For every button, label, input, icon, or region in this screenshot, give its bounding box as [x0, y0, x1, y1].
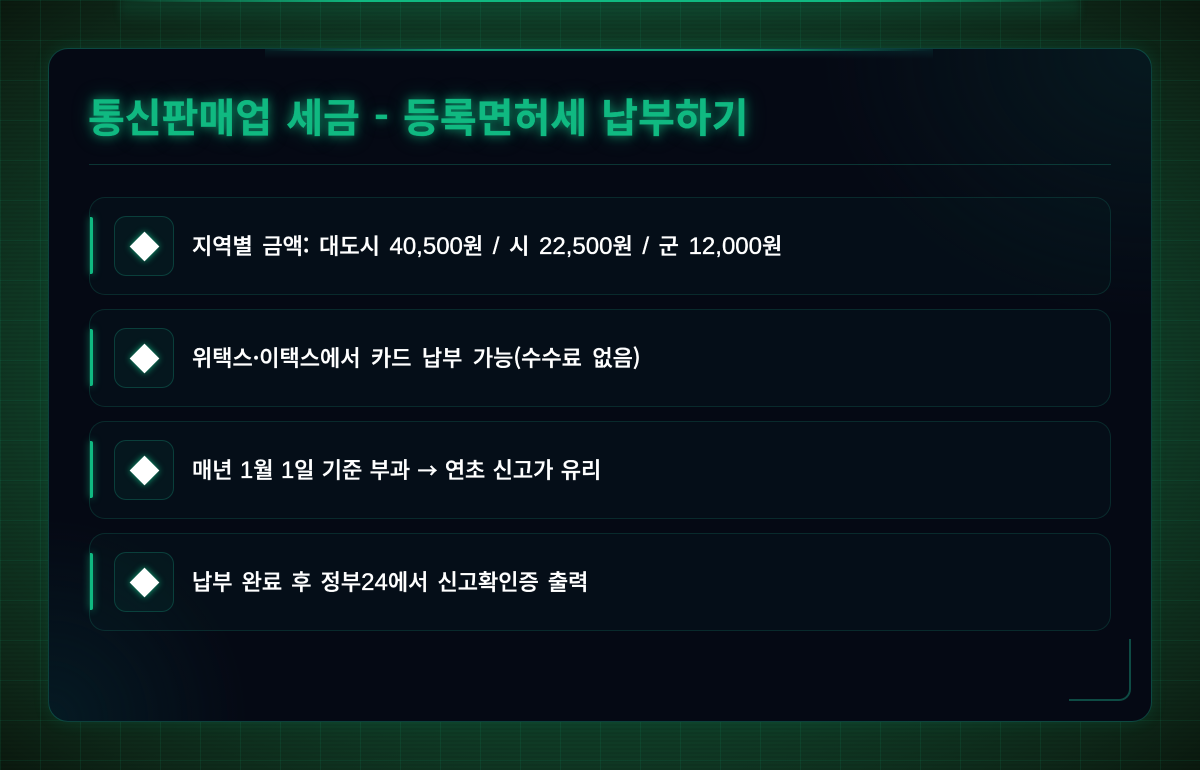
list item: card payment [89, 309, 1111, 407]
icon: diamond [114, 552, 174, 612]
icon: diamond [114, 216, 174, 276]
list item: January 1 basis [89, 421, 1111, 519]
list item: regional amounts [89, 197, 1111, 295]
list item: print confirmation [89, 533, 1111, 631]
icon: diamond [114, 440, 174, 500]
corner accent [1069, 639, 1131, 701]
text: print confirmation: 납부 완료 후 정부24에서 신고확인증 출력 [192, 565, 588, 597]
text: card payment: 위택스·이택스에서 카드 납부 가능(수수료 없음) [192, 341, 641, 373]
icon: diamond [114, 328, 174, 388]
title: 통신판매업 세금 - 등록면허세 납부하기 [88, 86, 748, 144]
text: regional amounts: 지역별 금액: 대도시 40,500원 / 시 22,500원 / 군 12,000원 [192, 229, 782, 261]
text: January 1 basis: 매년 1월 1일 기준 부과 → 연초 신고가 유리 [192, 453, 601, 485]
